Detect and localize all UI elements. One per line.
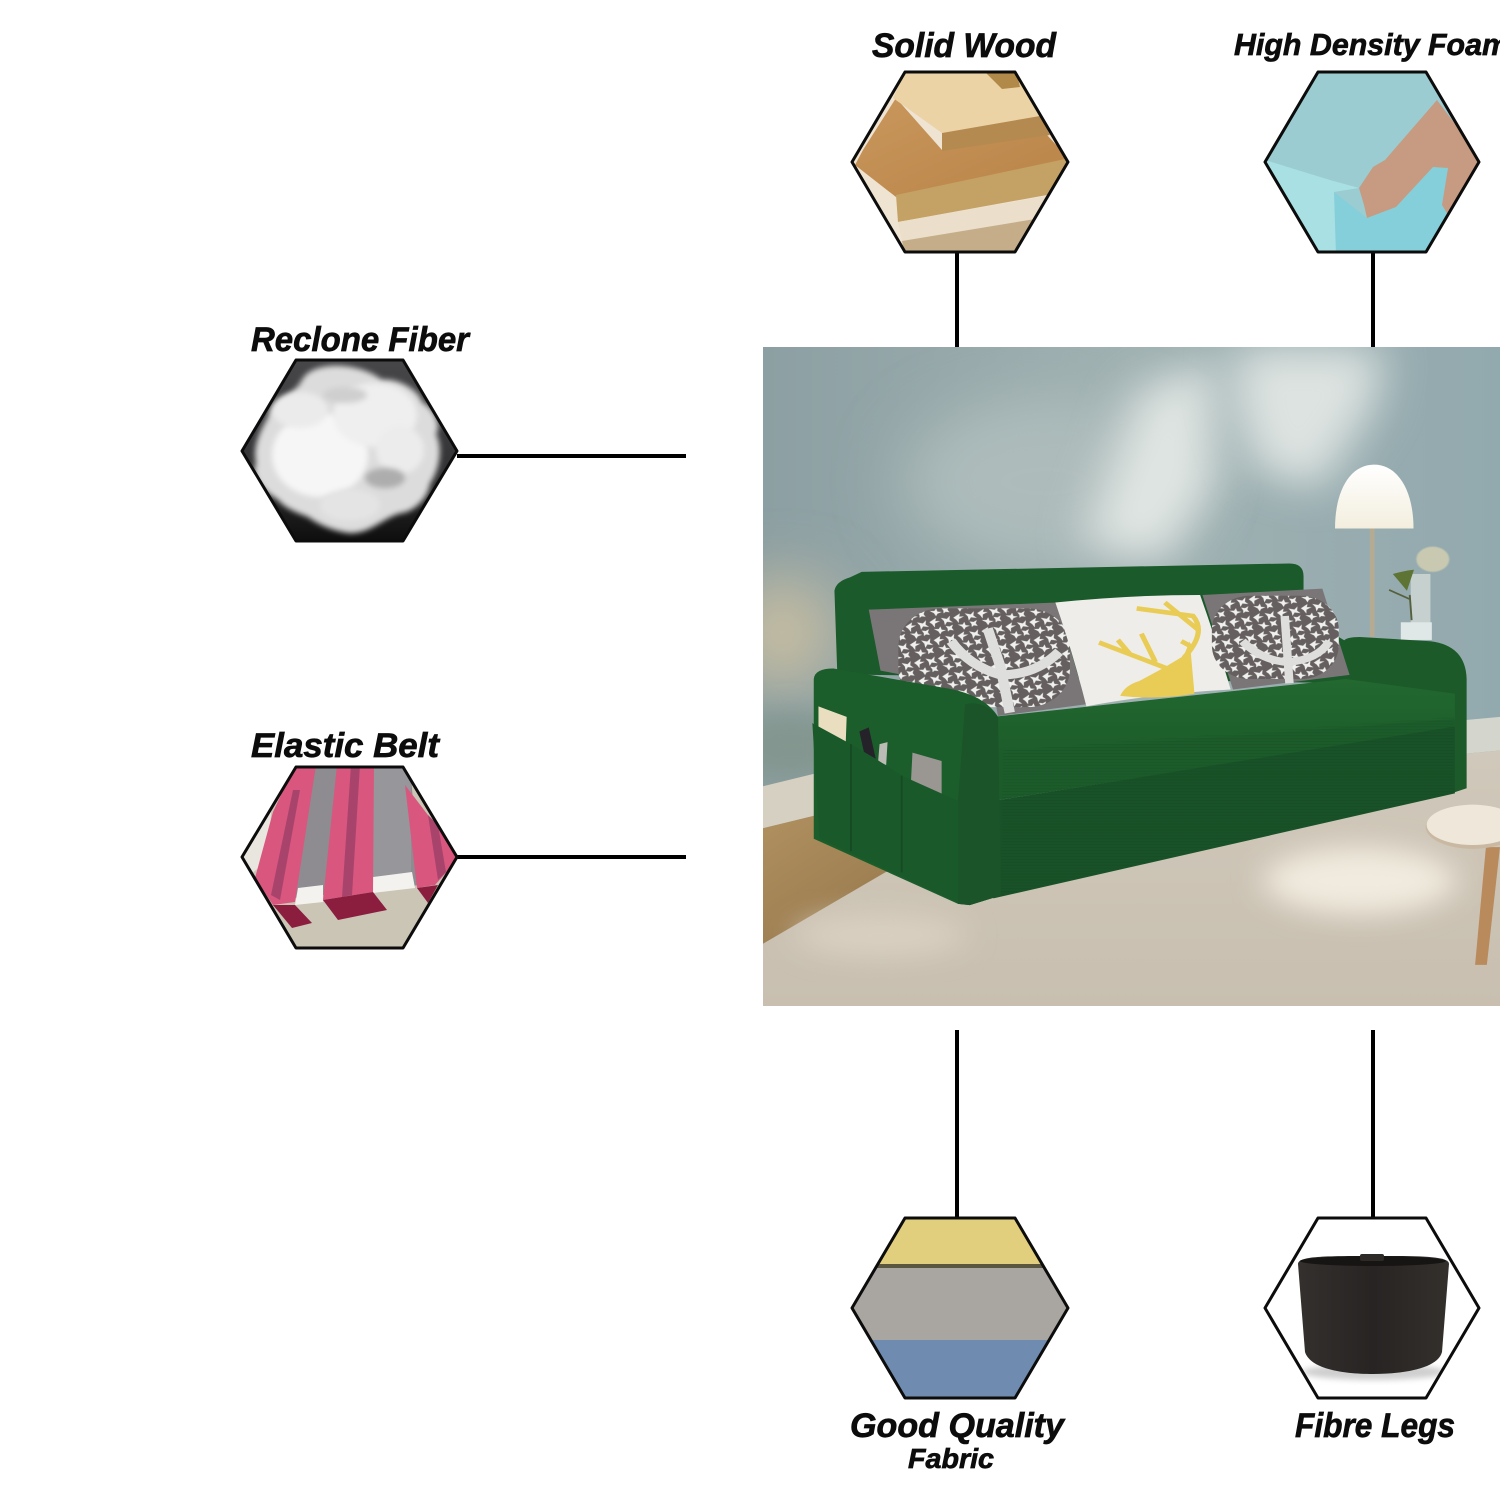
left pillow	[869, 603, 1086, 716]
plant in vase	[1389, 547, 1449, 640]
left arm	[814, 669, 1001, 905]
center pillow with stag	[1055, 595, 1231, 706]
icon: solid wood hexagon	[850, 70, 1070, 255]
heading: fibre legs: Fibre Legs	[1295, 1407, 1455, 1445]
heading: reclone fiber: Reclone Fiber	[251, 321, 471, 359]
icon: elastic belt hexagon	[240, 765, 460, 950]
connector: high density foam	[1371, 252, 1375, 347]
sofa back	[834, 563, 1346, 683]
icon: fabric hexagon	[850, 1216, 1070, 1402]
room background	[725, 347, 1500, 1006]
icon: foam hexagon	[1263, 70, 1483, 255]
right arm	[1343, 637, 1467, 792]
pocket contents	[818, 706, 942, 796]
connector: solid wood	[955, 252, 959, 347]
icon: fibre leg hexagon	[1263, 1216, 1483, 1401]
sofa	[812, 563, 1467, 905]
photo: green sofa in room	[763, 347, 1500, 1006]
knit texture	[1001, 717, 1454, 895]
heading: solid wood: Solid Wood	[872, 27, 1057, 65]
subheading: fabric: Fabric	[908, 1443, 994, 1474]
side table	[1426, 805, 1500, 965]
icon: fiber hexagon	[240, 358, 460, 543]
sofa base	[993, 727, 1455, 898]
connector: elastic belt	[457, 855, 686, 859]
connector: fibre legs	[1371, 1030, 1375, 1218]
side pocket	[812, 723, 958, 903]
seat front	[993, 719, 1455, 801]
connector: good quality fabric	[955, 1030, 959, 1218]
heading: elastic belt: Elastic Belt	[251, 727, 441, 765]
seat cushion	[993, 679, 1455, 757]
connector: reclone fiber	[457, 454, 686, 458]
floor lamp	[1335, 465, 1414, 637]
right pillow	[1202, 589, 1350, 690]
heading: good quality fabric: Good Quality	[850, 1407, 1066, 1445]
arm outer side	[958, 703, 1001, 905]
